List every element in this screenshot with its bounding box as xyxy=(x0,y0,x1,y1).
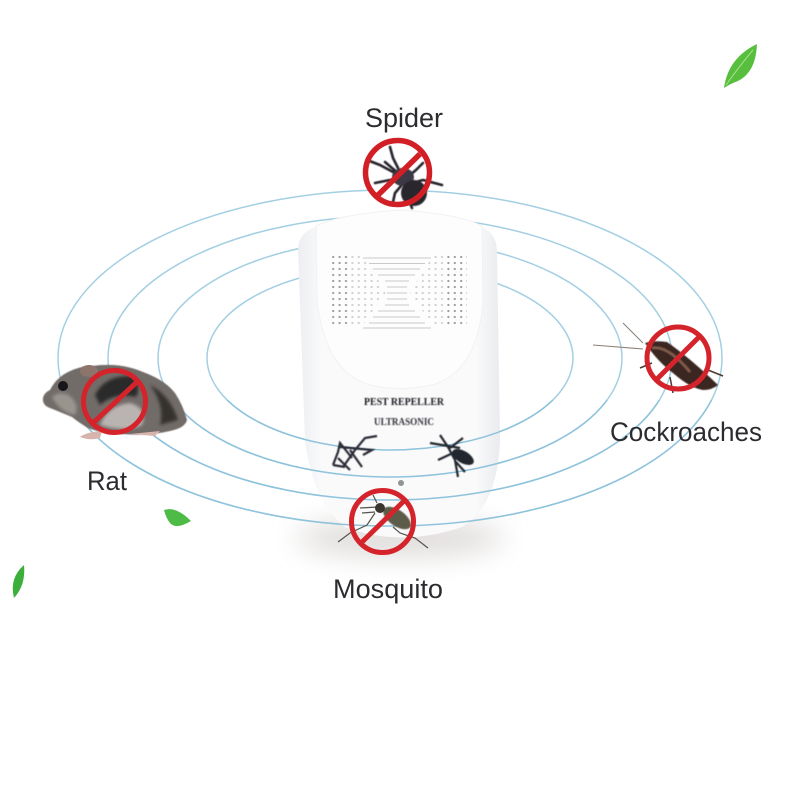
rat feet xyxy=(80,431,160,439)
repeller device xyxy=(298,210,500,538)
front panel curve xyxy=(316,210,483,388)
rat eye xyxy=(58,381,68,391)
sound wave rings over device xyxy=(86,400,712,527)
icon: dead insect right xyxy=(430,435,476,477)
icon: rat crossed out xyxy=(43,365,187,439)
product label: PEST REPELLER xyxy=(364,397,444,408)
rat fur markings xyxy=(52,376,178,429)
icon: mosquito crossed out xyxy=(338,490,428,552)
speaker grille xyxy=(330,254,467,328)
indicator light xyxy=(398,480,404,486)
label: Mosquito: Mosquito xyxy=(333,574,443,604)
icon: spider crossed out xyxy=(366,140,442,208)
rat ear xyxy=(80,365,98,377)
label: Spider: Spider xyxy=(365,103,443,133)
icon: dead insect left xyxy=(333,436,377,470)
icon: leaf top right xyxy=(724,44,757,88)
icon: leaf left xyxy=(13,565,24,598)
label: Rat: Rat xyxy=(87,466,127,496)
product label: ULTRASONIC xyxy=(374,417,434,428)
icon: leaf middle xyxy=(164,509,191,526)
rat body xyxy=(43,365,187,435)
sound wave rings behind device xyxy=(58,190,722,526)
icon: cockroach crossed out xyxy=(593,323,723,393)
device shadow xyxy=(295,520,505,556)
product label xyxy=(364,397,444,428)
label: Cockroaches: Cockroaches xyxy=(610,417,762,447)
